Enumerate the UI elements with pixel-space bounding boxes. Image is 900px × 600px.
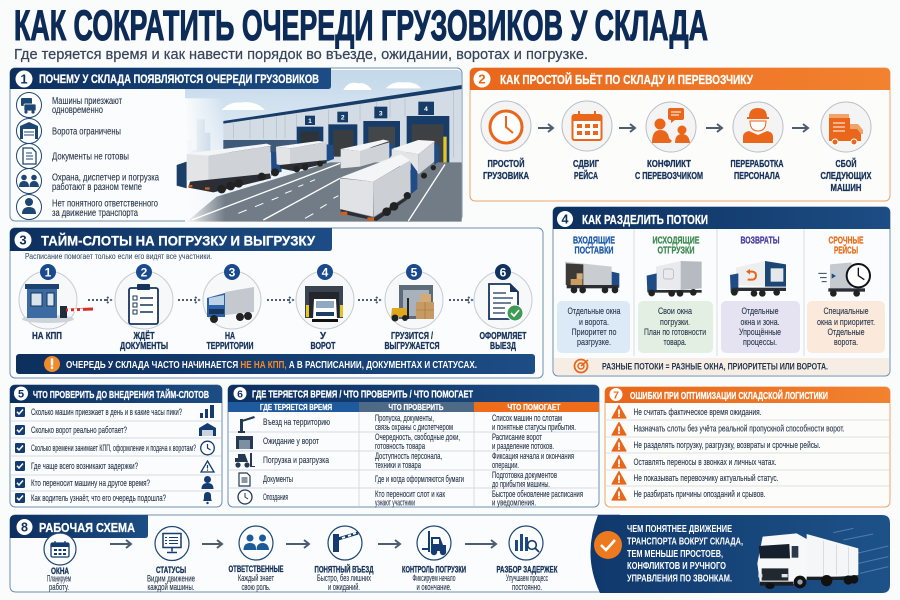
warehouse illustration: 4 xyxy=(424,106,428,113)
row: lateness: Опоздания xyxy=(263,492,288,502)
panel 7: logistics mistakes xyxy=(605,387,890,507)
dotted arrow xyxy=(178,297,199,303)
arrow xyxy=(202,540,222,548)
step: delay analysis: РАЗБОР ЗАДЕРЖЕК xyxy=(496,564,558,574)
column: outbound xyxy=(638,236,713,353)
column: outbound: План по готовности xyxy=(644,327,706,338)
row: gates xyxy=(15,423,216,436)
step: carrier conflict: С ПЕРЕВОЗЧИКОМ xyxy=(635,171,703,182)
cause: nobody responsible: за движение транспорта xyxy=(52,208,138,219)
step: statuses: каждой машины. xyxy=(148,582,194,592)
column: urgent: Специальные xyxy=(824,306,868,317)
step: windows xyxy=(44,533,76,592)
summary strip xyxy=(554,358,889,375)
step: staff overtime: ПЕРЕРАБОТКА xyxy=(730,159,784,170)
cause: simultaneous arrival: Машины приезжают xyxy=(52,96,122,107)
step 2: documents: 2 xyxy=(141,266,148,280)
step 3: on the territory: НА xyxy=(225,331,235,342)
row: driver notice: Как водитель узнаёт, что его очередь подошла? xyxy=(31,493,166,503)
row: loading: техники и товара xyxy=(375,460,421,470)
heading bar xyxy=(10,385,222,403)
step: next trucks disrupted: МАШИН xyxy=(830,183,862,194)
column: inbound: ВХОДЯЩИЕ xyxy=(573,236,615,246)
column: inbound: и ворота. xyxy=(579,317,609,328)
number: 1 xyxy=(20,72,28,86)
cause: limited gates: Ворота ограничены xyxy=(52,126,121,138)
column headers: ЧТО ПОМОГАЕТ xyxy=(508,403,561,412)
arrow xyxy=(538,124,553,132)
step: clear entry: Быстро, без лишних xyxy=(317,573,371,583)
step: responsible: Каждый знает xyxy=(238,573,274,583)
row: entry: Пропуска, документы, xyxy=(375,413,434,423)
step: carrier conflict: КОНФЛИКТ xyxy=(647,159,691,170)
number badge xyxy=(14,232,32,248)
step: delay analysis xyxy=(496,526,558,592)
row: gates: Сколько ворот реально работает? xyxy=(31,425,127,435)
step: loading control: и окончание. xyxy=(416,582,452,592)
row: entry: Въезд на территорию xyxy=(263,417,330,427)
cause: simultaneous arrival: одновременно xyxy=(52,105,103,116)
column headers: ЧТО ПРОВЕРИТЬ xyxy=(388,403,444,412)
row: loading: Фиксация начала и окончания xyxy=(492,451,574,461)
subtitle: Где теряется время и как навести порядок во въезде, ожидании, воротах и погрузке. xyxy=(14,47,588,63)
number badge xyxy=(557,211,573,227)
step: responsible: свою роль. xyxy=(242,582,270,592)
arrow xyxy=(286,540,309,548)
row: lateness: Кто переносит слот и как xyxy=(375,489,445,499)
step: schedule shift xyxy=(562,101,612,182)
column: returns: процессы. xyxy=(743,337,777,348)
callout text: ТРАНСПОРТА ВОКРУГ СКЛАДА, xyxy=(627,536,743,548)
step: schedule shift: РЕЙСА xyxy=(574,169,598,182)
row: documents: Подготовка документов xyxy=(492,470,557,480)
panel 4: split the flows xyxy=(553,207,890,376)
column headers xyxy=(228,402,599,412)
heading bar xyxy=(605,387,890,403)
row: time: Сколько времени занимает КПП, оформление и подача к воротам? xyxy=(31,443,196,453)
step 6: exit paperwork: 6 xyxy=(500,266,507,280)
heading bar xyxy=(228,385,599,402)
step: statuses xyxy=(147,526,195,592)
column: returns xyxy=(721,236,800,353)
row: entry: Список машин по слотам xyxy=(492,413,562,423)
step 6: exit paperwork: ОФОРМЛЯЕТ xyxy=(480,331,526,342)
arrow xyxy=(378,540,400,548)
column: returns: Упрощённые xyxy=(739,327,781,338)
dotted arrow xyxy=(267,297,293,303)
callout text: ТЕМ МЕНЬШЕ ПРОСТОЕВ, xyxy=(627,548,723,560)
row: documents: до прибытия машины. xyxy=(492,479,550,489)
heading text: ПОЧЕМУ У СКЛАДА ПОЯВЛЯЮТСЯ ОЧЕРЕДИ ГРУЗОВИКОВ xyxy=(39,74,319,86)
step 3: on the territory: ТЕРРИТОРИИ xyxy=(206,341,254,352)
column: returns: ВОЗВРАТЫ xyxy=(740,236,780,246)
step: truck downtime xyxy=(481,101,531,182)
mistake 6: Не разбирать причины опозданий и срывов. xyxy=(634,489,766,499)
row: lateness: узнают участники xyxy=(375,498,415,508)
row: entry: и понятные статусы прибытия. xyxy=(492,422,576,432)
truck D xyxy=(392,140,435,154)
column: outbound: ОТГРУЗКИ xyxy=(658,246,694,256)
number badge xyxy=(610,388,622,401)
column: returns: окна и зона. xyxy=(740,317,780,328)
warehouse illustration xyxy=(177,70,462,222)
panel 5: checklist xyxy=(10,385,222,507)
row: waiting at gates: Ожидание у ворот xyxy=(263,436,319,446)
warehouse illustration: 1 xyxy=(308,118,312,125)
row: waiting at gates: готовность товара xyxy=(375,441,425,451)
column: inbound: разгрузке. xyxy=(577,337,611,348)
callout text: УПРАВЛЕНИЯ ПО ЗВОНКАМ. xyxy=(627,572,732,584)
row: entry: связь охраны с диспетчером xyxy=(375,422,453,432)
arrow xyxy=(792,124,808,132)
number: 8 xyxy=(21,520,28,534)
cause: simultaneous arrival xyxy=(16,92,122,118)
column: inbound: Приоритет по xyxy=(572,327,616,338)
row: loading xyxy=(235,451,574,470)
mistake 1: Не считать фактическое время ожидания. xyxy=(634,407,762,417)
step 1: checkpoint: НА КПП xyxy=(32,331,62,342)
step: next trucks disrupted xyxy=(820,102,872,194)
truck far behind xyxy=(177,162,187,188)
number badge xyxy=(14,386,28,400)
step: clear entry: ПОНЯТНЫЙ ВЪЕЗД xyxy=(314,564,374,574)
row: rescheduling xyxy=(15,476,214,489)
cause: documents not ready xyxy=(16,144,129,168)
step: statuses: Видим движение xyxy=(147,574,195,584)
warning banner: ОЧЕРЕДЬ У СКЛАДА ЧАСТО НАЧИНАЕТСЯ НЕ НА КПП, А В РАСПИСАНИИ, ДОКУМЕНТАХ И СТАТУСАХ. xyxy=(66,359,477,371)
column: urgent: ворота. xyxy=(834,337,858,348)
mistake 5: Не показывать перевозчику актуальный статус. xyxy=(634,473,778,483)
row: driver notice xyxy=(15,492,212,504)
icon: white truck xyxy=(757,528,888,589)
summary strip: РАЗНЫЕ ПОТОКИ = РАЗНЫЕ ОКНА, ПРИОРИТЕТЫ ИЛИ ВОРОТА. xyxy=(602,362,828,372)
heading text: РАБОЧАЯ СХЕМА xyxy=(39,520,136,535)
step 2: documents: ДОКУМЕНТЫ xyxy=(120,341,168,352)
column: inbound: Отдельные окна xyxy=(568,306,621,317)
step: delay analysis: Улучшаем процесс xyxy=(506,573,548,583)
step: clear entry xyxy=(314,526,374,592)
row: documents: Документы xyxy=(263,474,293,484)
dotted arrow xyxy=(88,297,111,303)
heading bar xyxy=(10,515,148,538)
step 4: at the gate: ВОРОТ xyxy=(310,341,336,352)
heading bar xyxy=(553,207,890,229)
column: outbound: товара. xyxy=(664,337,686,348)
number badge xyxy=(234,387,246,400)
step 4: at the gate: У xyxy=(320,331,327,342)
callout: conclusion xyxy=(590,515,890,593)
step 6: exit paperwork xyxy=(474,264,532,352)
row: lateness: и уведомления. xyxy=(492,498,536,508)
heading text: КАК РАЗДЕЛИТЬ ПОТОКИ xyxy=(582,213,708,227)
icon: check mark xyxy=(594,531,622,559)
note: Расписание помогает только если его видят все участники. xyxy=(25,252,212,261)
panel 8: workflow xyxy=(10,515,620,592)
number badge xyxy=(16,519,32,535)
step 2: documents: ЖДЁТ xyxy=(133,329,154,342)
step 1: checkpoint: 1 xyxy=(45,266,52,280)
mistake 3: Не разделять погрузку, разгрузку, возвраты и срочные рейсы. xyxy=(634,440,820,450)
heading bar xyxy=(10,228,332,251)
truck A xyxy=(187,144,272,156)
arrow xyxy=(465,540,496,548)
step: windows: работу. xyxy=(49,582,69,592)
panel 2: how downtime hurts xyxy=(470,68,890,201)
step 5: loading: 5 xyxy=(411,266,418,280)
step: responsible: ОТВЕТСТВЕННЫЕ xyxy=(228,564,284,574)
step: responsible xyxy=(228,526,284,592)
arrow xyxy=(706,124,722,132)
panel 6: where time is lost table xyxy=(228,385,599,508)
row: peaks: Сколько машин приезжает в день и в какие часы пики? xyxy=(31,407,182,417)
warehouse illustration: 2 xyxy=(341,115,345,122)
number: 7 xyxy=(613,390,619,402)
row: loading: Погрузка и разгрузка xyxy=(263,455,329,465)
number: 3 xyxy=(19,232,27,248)
mistake 4: Оставлять переносы в звонках и личных чатах. xyxy=(634,457,776,467)
step 5: loading xyxy=(384,264,443,352)
step 2: documents xyxy=(115,264,173,352)
cause: limited gates xyxy=(16,118,121,144)
step: delay analysis: постоянно. xyxy=(512,582,542,592)
column: inbound: ПОСТАВКИ xyxy=(574,246,614,256)
step: staff overtime xyxy=(730,102,784,182)
column: urgent xyxy=(807,236,885,353)
row: waiting at gates: и разделение потоков. xyxy=(492,441,554,451)
step 4: at the gate xyxy=(296,264,354,352)
step: staff overtime: ПЕРСОНАЛА xyxy=(734,171,780,182)
step: truck downtime: ГРУЗОВИКА xyxy=(483,171,529,182)
column: outbound: погрузки. xyxy=(660,317,690,328)
row: time xyxy=(15,441,214,455)
heading text: ТАЙМ-СЛОТЫ НА ПОГРУЗКУ И ВЫГРУЗКУ xyxy=(41,232,315,248)
cause: different pace: работают в разном темпе xyxy=(52,181,142,193)
step: loading control xyxy=(402,526,466,592)
column: outbound: Свои окна xyxy=(658,306,693,317)
row: documents xyxy=(239,470,557,489)
column: urgent: СРОЧНЫЕ xyxy=(828,236,864,246)
step: schedule shift: СДВИГ xyxy=(573,159,599,170)
step: next trucks disrupted: СБОЙ xyxy=(836,157,856,170)
row: lateness xyxy=(238,489,583,508)
column: returns: Отдельные xyxy=(742,306,778,317)
panel 3: time slots xyxy=(10,228,543,378)
row: loading: операции. xyxy=(492,460,519,470)
step: carrier conflict xyxy=(635,102,703,182)
number: 2 xyxy=(478,72,486,86)
step: clear entry: и ожиданий. xyxy=(328,582,360,592)
heading bar xyxy=(10,68,331,89)
truck B xyxy=(276,141,327,148)
row: delays: Где чаще всего возникают задержки? xyxy=(31,461,138,471)
cause: different pace xyxy=(16,168,159,194)
mistake 6 xyxy=(612,488,766,500)
cause: nobody responsible xyxy=(16,194,158,220)
column: inbound xyxy=(557,236,630,353)
arrow xyxy=(110,540,131,548)
heading bar xyxy=(470,68,890,90)
column: urgent: РЕЙСЫ xyxy=(834,244,858,256)
truck C xyxy=(341,140,389,151)
arrow xyxy=(619,124,635,132)
step: windows: ОКНА xyxy=(51,566,69,576)
step: statuses: СТАТУСЫ xyxy=(156,565,186,575)
row: documents: Где и когда оформляются бумаги xyxy=(375,474,464,484)
step 1: checkpoint xyxy=(19,264,93,342)
warehouse illustration: 3 xyxy=(379,111,383,118)
step 4: at the gate: 4 xyxy=(322,266,329,280)
step 5: loading: ГРУЗИТСЯ / xyxy=(391,331,433,342)
truck E xyxy=(340,154,410,182)
row: entry xyxy=(238,413,576,433)
heading text: ЧТО ПРОВЕРИТЬ ДО ВНЕДРЕНИЯ ТАЙМ-СЛОТОВ xyxy=(33,388,209,401)
cause: nobody responsible: Нет понятного ответственного xyxy=(52,198,158,210)
row: lateness: Быстрое обновление расписания xyxy=(492,489,583,499)
cause: documents not ready: Документы не готовы xyxy=(52,152,129,162)
row: peaks xyxy=(15,405,214,418)
step: windows: Планируем xyxy=(47,574,71,584)
step: loading control: Фиксируем начало xyxy=(412,573,456,583)
row: waiting at gates: Очередность, свободные доки, xyxy=(375,432,460,442)
warning banner xyxy=(16,354,535,374)
callout text xyxy=(627,523,743,584)
step 3: on the territory: 3 xyxy=(229,266,236,280)
column: urgent: окна и приоритет. xyxy=(817,317,875,328)
step: next trucks disrupted: СЛЕДУЮЩИХ xyxy=(820,171,872,182)
number: 5 xyxy=(18,388,24,400)
column: outbound: ИСХОДЯЩИЕ xyxy=(652,236,700,246)
mistake 2 xyxy=(612,422,844,435)
number badge xyxy=(16,70,32,88)
row: waiting at gates xyxy=(236,432,554,451)
dotted arrow xyxy=(358,297,380,303)
column headers: ГДЕ ТЕРЯЕТСЯ ВРЕМЯ xyxy=(260,403,332,412)
panel 1: why queues appear xyxy=(10,68,462,222)
step: loading control: КОНТРОЛЬ ПОГРУЗКИ xyxy=(402,564,466,574)
step 6: exit paperwork: ВЫЕЗД xyxy=(490,341,516,352)
mistake 4 xyxy=(612,456,776,468)
row: loading: Доступность персонала, xyxy=(375,451,442,461)
step 3: on the territory xyxy=(203,264,261,352)
column: urgent: Отдельные xyxy=(828,327,864,338)
heading text: КАК ПРОСТОЙ БЬЁТ ПО СКЛАДУ И ПЕРЕВОЗЧИКУ xyxy=(500,72,753,87)
step: truck downtime: ПРОСТОЙ xyxy=(488,157,524,170)
number badge xyxy=(474,70,490,88)
mistake 1 xyxy=(612,406,762,418)
number: 6 xyxy=(237,388,243,400)
cause: different pace: Охрана, диспетчер и погрузка xyxy=(52,172,159,184)
heading text: ГДЕ ТЕРЯЕТСЯ ВРЕМЯ / ЧТО ПРОВЕРИТЬ / ЧТО ПОМОГАЕТ xyxy=(252,390,473,400)
callout text: ЧЕМ ПОНЯТНЕЕ ДВИЖЕНИЕ xyxy=(627,523,732,535)
mistake 3 xyxy=(612,438,820,451)
row: waiting at gates: Расписание ворот xyxy=(492,432,542,442)
row: rescheduling: Кто переносит машину на другое время? xyxy=(31,478,150,488)
step 5: loading: ВЫГРУЖАЕТСЯ xyxy=(384,341,440,352)
number: 4 xyxy=(562,212,569,226)
mistake 5 xyxy=(612,472,778,484)
callout text: КОНФЛИКТОВ И РУЧНОГО xyxy=(627,560,726,572)
dotted arrow xyxy=(449,297,472,303)
